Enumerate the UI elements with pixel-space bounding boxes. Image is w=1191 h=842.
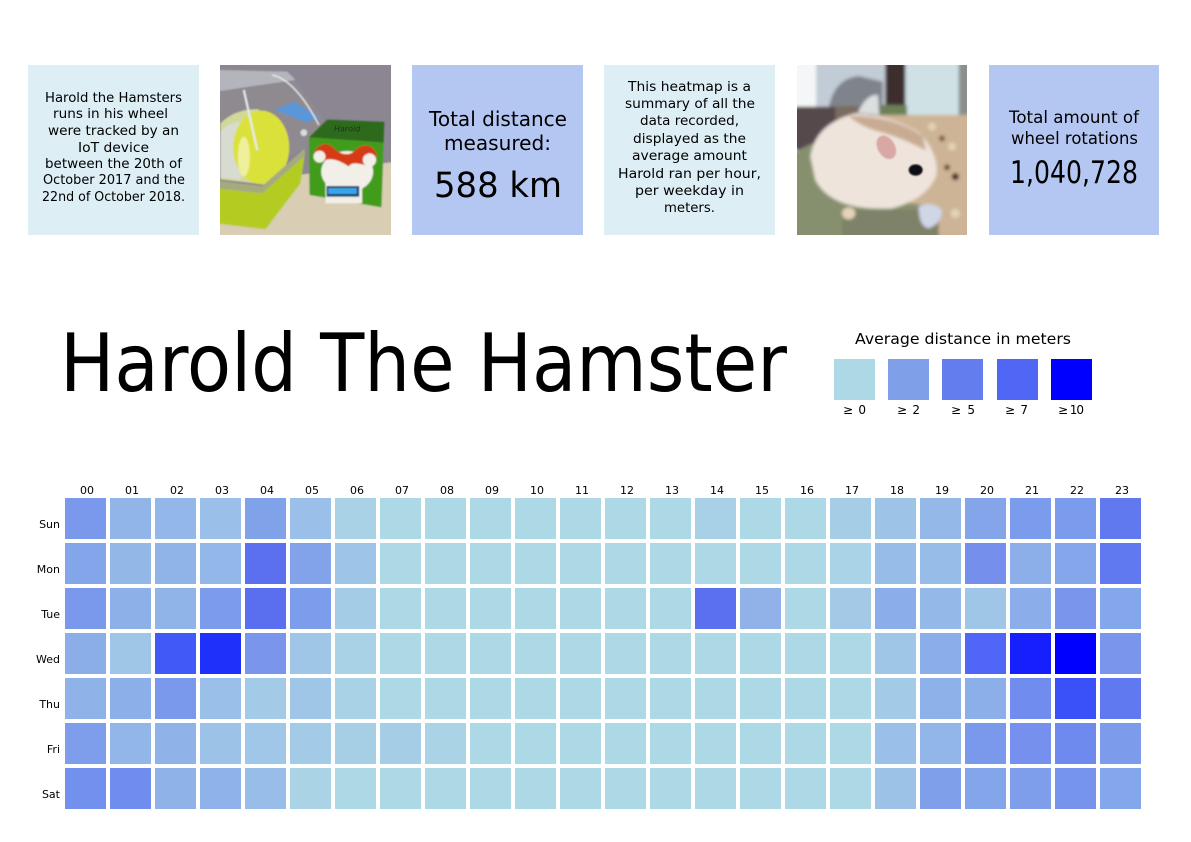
legend: ≥ 0 xyxy=(843,403,866,417)
heatmap hour labels: 02 xyxy=(170,484,184,497)
heatmap grid xyxy=(65,498,1141,809)
heatmap weekday labels xyxy=(36,518,61,801)
heatmap weekday labels: Fri xyxy=(47,743,60,756)
heatmap hour labels: 16 xyxy=(800,484,814,497)
heatmap hour labels: 12 xyxy=(620,484,634,497)
value: 588 km: 588 km xyxy=(434,166,562,206)
heading: total rotations xyxy=(1008,108,1140,149)
legend: ≥ 10 xyxy=(1058,403,1084,417)
heatmap hour labels: 10 xyxy=(530,484,544,497)
heatmap hour labels xyxy=(80,484,1129,497)
heatmap hour labels: 11 xyxy=(575,484,589,497)
heatmap hour labels: 13 xyxy=(665,484,679,497)
panel: tracking description: October 2017 and the xyxy=(43,173,185,188)
panel: tracking description: 22nd of October 2018. xyxy=(42,190,185,205)
heatmap hour labels: 03 xyxy=(215,484,229,497)
heatmap weekday labels: Mon xyxy=(37,563,60,576)
panel: tracking description: between the 20th of xyxy=(45,157,182,172)
panel: tracking description: were tracked by an xyxy=(48,124,179,139)
panel: tracking description: Harold the Hamsters xyxy=(45,91,182,106)
panel: heatmap description: average amount xyxy=(632,149,747,164)
panel: heatmap description xyxy=(604,65,775,235)
heatmap hour labels: 06 xyxy=(350,484,364,497)
legend: Average distance in meters xyxy=(855,330,1071,348)
heatmap hour labels: 08 xyxy=(440,484,454,497)
panel: total wheel rotations xyxy=(989,65,1159,235)
legend xyxy=(834,330,1092,417)
heatmap hour labels: 21 xyxy=(1025,484,1039,497)
heatmap hour labels: 00 xyxy=(80,484,94,497)
heatmap weekday labels: Sun xyxy=(39,518,60,531)
panel: heatmap description: displayed as the xyxy=(633,132,746,147)
heatmap hour labels: 01 xyxy=(125,484,139,497)
value: 1,040,728: 1,040,728 xyxy=(1010,155,1138,191)
legend: ≥ 2 xyxy=(897,403,920,417)
heatmap weekday labels: Sat xyxy=(42,788,61,801)
heatmap weekday labels: Thu xyxy=(38,698,60,711)
heatmap hour labels: 22 xyxy=(1070,484,1084,497)
panel: heatmap description: This heatmap is a xyxy=(627,80,751,95)
heatmap hour labels: 14 xyxy=(710,484,724,497)
heatmap hour labels: 18 xyxy=(890,484,904,497)
panel: heatmap description: Harold ran per hour, xyxy=(618,167,761,182)
title: Harold The Hamster xyxy=(60,317,787,410)
heatmap hour labels: 05 xyxy=(305,484,319,497)
heatmap hour labels: 04 xyxy=(260,484,274,497)
heading: total rotations: wheel rotations xyxy=(1011,129,1138,149)
panel: tracking description: runs in his wheel xyxy=(53,107,168,122)
panel: total distance measured xyxy=(412,65,583,235)
heatmap hour labels: 09 xyxy=(485,484,499,497)
heatmap hour labels: 07 xyxy=(395,484,409,497)
heading: total distance: measured: xyxy=(444,131,551,155)
heatmap hour labels: 15 xyxy=(755,484,769,497)
legend: ≥ 7 xyxy=(1005,403,1028,417)
panel: heatmap description: summary of all the xyxy=(625,97,755,112)
panel: heatmap description: data recorded, xyxy=(640,114,739,129)
heatmap hour labels: 19 xyxy=(935,484,949,497)
heatmap hour labels: 20 xyxy=(980,484,994,497)
heading: total distance xyxy=(428,107,567,155)
legend: ≥ 5 xyxy=(951,403,975,417)
heading: total distance: Total distance xyxy=(428,107,567,131)
panel: tracking description: IoT device xyxy=(78,141,149,156)
heatmap hour labels: 23 xyxy=(1115,484,1129,497)
panel: heatmap description: per weekday in xyxy=(635,184,744,199)
panel: tracking description xyxy=(28,65,199,235)
heatmap weekday labels: Wed xyxy=(36,653,60,666)
handwritten box label: Harold xyxy=(334,125,361,134)
panel: heatmap description: meters. xyxy=(664,201,715,216)
photo: hamster wheel cage and green IoT box xyxy=(220,65,391,235)
heatmap weekday labels: Tue xyxy=(40,608,60,621)
photo: hamster xyxy=(797,65,967,235)
heatmap hour labels: 17 xyxy=(845,484,859,497)
heading: total rotations: Total amount of xyxy=(1008,108,1140,128)
